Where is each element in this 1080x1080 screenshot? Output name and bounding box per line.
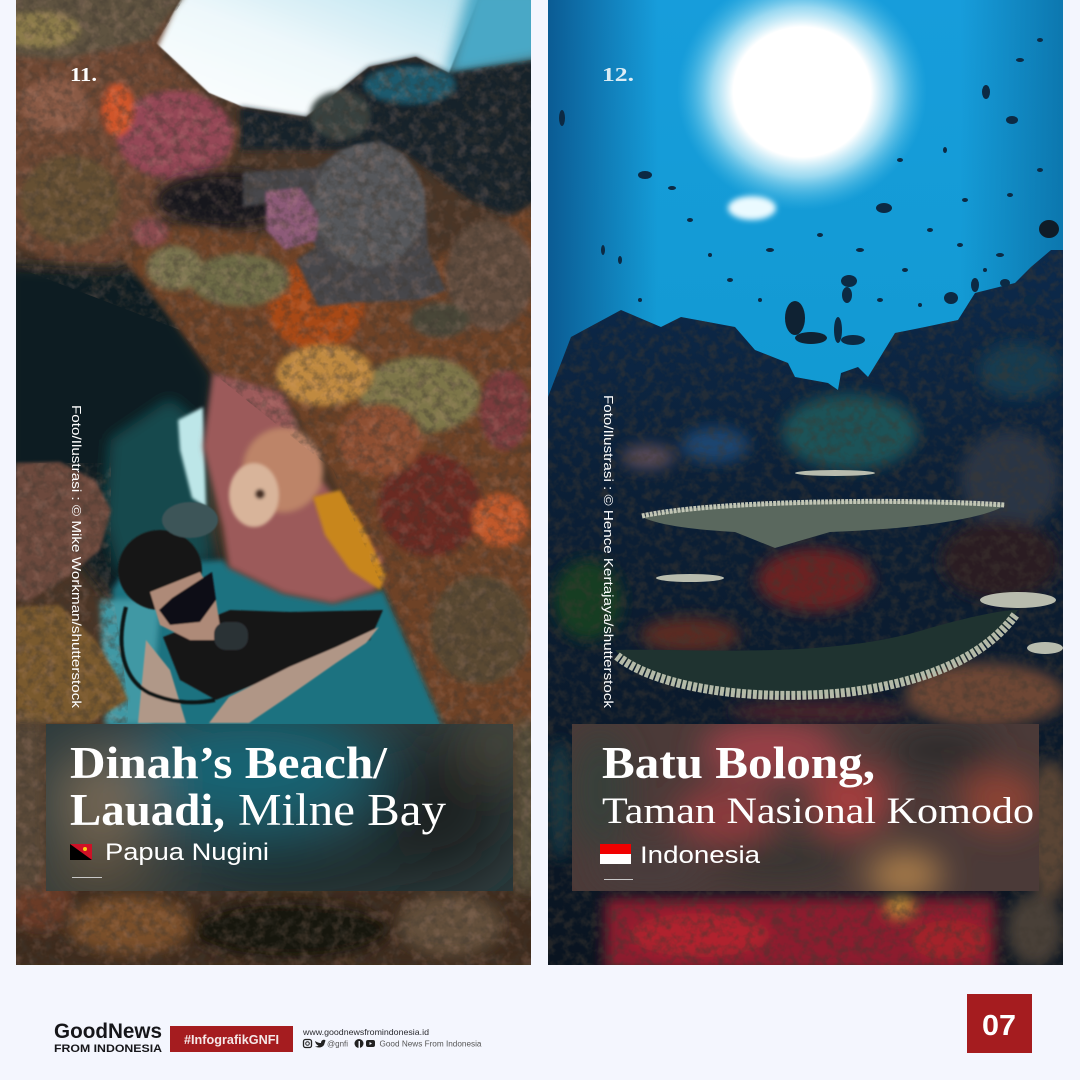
flag: Papua New Guinea bbox=[70, 844, 92, 860]
shadow under coral bbox=[155, 172, 295, 228]
place name: Taman Nasional Komodo bbox=[602, 791, 1034, 832]
country name: Papua Nugini bbox=[105, 839, 269, 866]
lower reef band bbox=[6, 720, 546, 970]
footer contact links bbox=[302, 1027, 482, 1048]
icon: facebook bbox=[354, 1039, 364, 1048]
photo credit left: Foto/Ilustrasi : © Mike Workman/shutterstock bbox=[69, 405, 84, 709]
upper table coral bbox=[642, 501, 1005, 548]
country name: Indonesia bbox=[640, 842, 761, 869]
teal water behind diver bbox=[100, 560, 445, 730]
pink barrel sponge bbox=[203, 373, 383, 603]
light opening in cave bbox=[178, 407, 206, 507]
hashtag badge bbox=[170, 1026, 293, 1052]
water surface light bbox=[156, 0, 480, 117]
reef texture bbox=[548, 250, 1063, 965]
photo: Dinah's Beach reef and diver bbox=[0, 0, 546, 970]
flag: Indonesia bbox=[600, 844, 631, 864]
frosted colour blobs bbox=[570, 720, 1040, 899]
darker water edges bbox=[548, 0, 1063, 400]
grey sponge bbox=[243, 140, 446, 307]
caption panel: Batu Bolong bbox=[570, 720, 1040, 899]
place name: Milne Bay bbox=[238, 785, 447, 835]
deep reef silhouette bbox=[546, 250, 1074, 973]
dark upper-right rock bbox=[240, 57, 540, 230]
caption panel: Dinah's Beach bbox=[46, 724, 513, 891]
upper-left coral bbox=[0, 0, 240, 265]
reef texture bbox=[16, 0, 531, 965]
hashtag badge: #InfografikGNFI bbox=[184, 1033, 279, 1047]
item number 12: 12. bbox=[602, 64, 634, 86]
sun glare bbox=[677, 0, 927, 210]
reef colour patches bbox=[546, 342, 1074, 973]
footer contact links: @gnfi bbox=[327, 1040, 348, 1048]
icon: youtube bbox=[366, 1040, 375, 1047]
item number 11: 11. bbox=[70, 64, 97, 86]
place name: Batu Bolong, bbox=[602, 738, 875, 788]
photo credit right: Foto/Ilustrasi : © Hence Kertajaya/shutterstock bbox=[601, 395, 616, 709]
diver bbox=[118, 502, 383, 723]
lower table coral bbox=[615, 610, 1018, 695]
icon: instagram bbox=[304, 1040, 312, 1048]
footer contact links: Good News From Indonesia bbox=[380, 1040, 482, 1048]
blue surface corner bbox=[445, 0, 545, 78]
page number box: 07 bbox=[982, 1010, 1016, 1042]
icon: twitter bbox=[315, 1040, 326, 1047]
place name bbox=[602, 738, 1034, 832]
dark cave bbox=[6, 260, 223, 600]
sponge opening bbox=[229, 463, 279, 527]
place name: Lauadi, bbox=[70, 785, 225, 835]
fish school bbox=[559, 38, 1059, 345]
footer logo: FROM INDONESIA bbox=[54, 1043, 162, 1055]
place name bbox=[70, 738, 447, 835]
footer logo bbox=[54, 1020, 162, 1055]
central orange reef bbox=[120, 200, 540, 740]
small coral plates bbox=[656, 470, 1063, 654]
frosted colour blobs bbox=[46, 724, 513, 891]
photo: Batu Bolong sunlit reef bbox=[546, 0, 1074, 973]
page number box bbox=[967, 994, 1032, 1053]
left corals bbox=[16, 462, 128, 723]
secondary glare bbox=[728, 196, 776, 220]
orange sponge bbox=[313, 490, 386, 590]
footer logo: GoodNews bbox=[54, 1020, 162, 1043]
place name: Dinah’s Beach/ bbox=[70, 738, 388, 788]
footer contact links: www.goodnewsfromindonesia.id bbox=[302, 1027, 429, 1037]
